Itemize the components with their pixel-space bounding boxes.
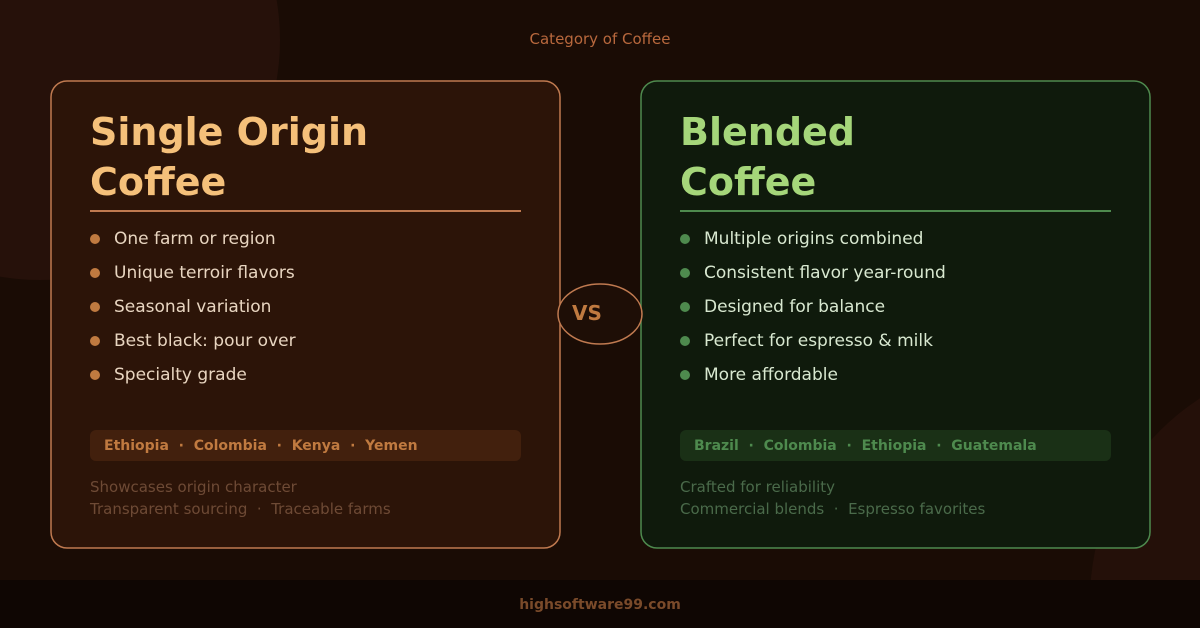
bullet list: single origin: One farm or region [114,229,276,249]
bullet list: blended: More affordable [704,365,838,385]
bullet list: blended: Multiple origins combined [704,229,923,249]
bullet list: blended [680,229,946,385]
bullet list: blended: Consistent flavor year-round [704,263,946,283]
tag box: blend origins [680,430,1111,461]
tag box: blend origins: Brazil · Colombia · Ethiopia · Guatemala [694,438,1037,454]
bullet list: blended: Perfect for espresso & milk [704,331,933,351]
footer notes: single origin: Showcases origin character [90,478,298,496]
bullet list: single origin: Unique terroir flavors [114,263,295,283]
heading: single origin: Single Origin [90,110,368,154]
footer notes: single origin [89,478,391,518]
footer bar: highsoftware99.com [519,597,681,613]
title: Category of Coffee [530,30,670,48]
bullet list: single origin: Best black: pour over [114,331,296,351]
footer bar [0,580,1200,628]
heading: single origin: Coffee [90,160,226,204]
footer notes: blended: Crafted for reliability [680,478,835,496]
footer notes: single origin: Transparent sourcing · Traceable farms [89,500,391,518]
bullet list: single origin: Seasonal variation [114,297,271,317]
footer notes: blended [680,478,986,518]
vs badge: VS [572,301,602,325]
bullet list: blended: Designed for balance [704,297,885,317]
tag box: origins [90,430,521,461]
panel: blended [641,81,1150,548]
footer notes: blended: Commercial blends · Espresso favorites [680,500,986,518]
heading: blended: Coffee [680,160,816,204]
tag box: origins: Ethiopia · Colombia · Kenya · Yemen [104,438,418,454]
bullet list: single origin: Specialty grade [114,365,247,385]
heading: blended: Blended [680,110,855,154]
panel: single origin [51,81,560,548]
vs badge [558,284,642,344]
bullet list: single origin [90,229,296,385]
